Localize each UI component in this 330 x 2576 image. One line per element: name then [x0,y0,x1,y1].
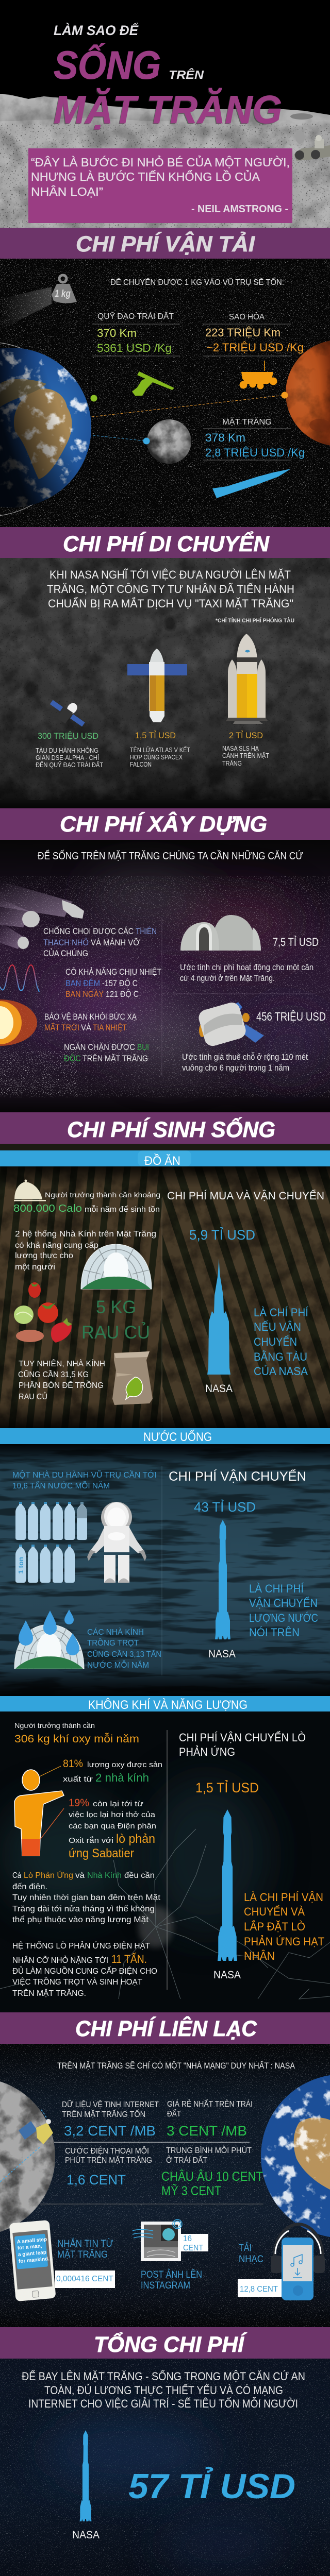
heading band: chi phí sinh sống: CHI PHÍ SINH SỐNG [67,1117,275,1142]
heading band: tổng chi phí: TỔNG CHI PHÍ [94,2331,248,2357]
photo label: INSTAGRAM [141,2280,190,2291]
stat: moon: MẶT TRĂNG [222,417,272,427]
icon: 1 kg weight with trail [0,275,77,330]
icon: nasa rocket silhouette [207,1259,230,1375]
panel: communications [0,2044,330,2327]
fertilizer text: TUY NHIÊN, NHÀ KÍNH [19,1360,105,1368]
base cost: 7,5 TỈ USD [273,936,319,948]
cost: atlas v: 1,5 TỈ USD [135,731,176,740]
panel: transport cost [0,259,330,527]
subheading band: đồ ăn [0,1150,330,1168]
icon: food cloche [14,1180,46,1201]
panel: total cost [0,2359,330,2576]
requirement: temperature: BAN NGÀY [65,989,104,999]
music label: TẢI [239,2242,252,2253]
19 percent text: 19% [69,1797,89,1809]
cost: atlas v [130,731,190,768]
19 percent text [69,1797,156,1860]
rocket label: NASA [72,2529,100,2541]
icon: dse-alpha capsule [46,692,91,733]
cost: dse-alpha: TÀU DU HÀNH KHÔNG [36,747,98,754]
music label [239,2242,263,2265]
title: trên: TRÊN [169,67,204,81]
reactor heading [179,1731,306,1758]
travel intro text: KHI NASA NGHĨ TỚI VIỆC ĐƯA NGƯỜI LÊN MẶT [50,568,291,581]
divider line [162,917,316,1076]
data stat earth: GIÁ RẺ NHẤT TRÊN TRÁI [167,2099,253,2109]
19 percent text: ứng Sabatier [69,1846,134,1860]
electricity text: Cả [12,1871,21,1880]
music price: 12,8 CENT [240,2285,278,2294]
photo price: 16 [183,2234,192,2243]
cost: atlas v: TÊN LỬA ATLAS V KẾT [130,746,190,754]
calorie text: mỗi năm để sinh tồn [85,1205,160,1214]
water cost note: LƯỢNG NƯỚC [249,1612,318,1624]
icon: smartphone message: a giant leap [18,2250,46,2258]
greenhouse text [15,1230,156,1272]
cost: dse-alpha: GIAN DSE-ALPHA - CHỈ [36,754,99,761]
call stat moon: CƯỚC ĐIỆN THOẠI MỖI [65,2146,149,2156]
communications intro: TRÊN MẶT TRĂNG SẼ CHỈ CÓ MỘT "NHÀ MẠNG" DUY NHẤT : NASA [57,2061,295,2071]
vegetable amount [81,1297,150,1343]
photo label [141,2269,202,2291]
requirement: temperature [65,967,161,999]
requirement: radiation: TIA NHIỆT [93,1023,127,1032]
calorie text: Người trưởng thành cần khoảng [45,1191,160,1199]
icon: person oxygen chart [14,1766,64,1856]
icon: water bottles [15,1502,87,1583]
cost: nasa sls [222,731,269,767]
81 percent text: 81% [63,1758,83,1770]
heading band: chi phí sinh sống [0,1112,330,1144]
electricity text: đến điện. [12,1883,47,1891]
requirement: dust: BỤI [137,1042,149,1052]
water cost: 43 TỈ USD [194,1499,256,1515]
call stat earth: MỸ 3 CENT [161,2183,221,2198]
reactor text: VIỆC TRỒNG TRỌT VÀ SINH HOẠT [12,1977,142,1987]
total intro: ĐỂ BAY LÊN MẶT TRĂNG - SỐNG TRONG MỘT CĂN CỨ AN [22,2369,305,2383]
transport heading: CHI PHÍ VẬN CHUYỂN [169,1469,306,1484]
title: làm sao để: LÀM SAO ĐỂ [54,22,139,38]
fertilizer text: RAU CỦ [19,1392,47,1401]
icon: nasa rocket [80,2430,91,2521]
call stat moon: 1,6 CENT [67,2172,126,2188]
rocket label: NASA [205,1383,233,1395]
moon surface background [0,93,330,228]
requirement: dust: NGĂN CHẶN ĐƯỢC [64,1042,135,1052]
music price [238,2279,282,2297]
food cost: 5,9 TỈ USD [189,1226,255,1243]
reactor cost note: LÀ CHI PHÍ VẬN [244,1891,323,1904]
requirement: radiation: MẶT TRỜI [44,1023,79,1032]
reactor heading: CHI PHÍ VẬN CHUYỂN LÒ [179,1731,306,1744]
stat: earth orbit [97,311,174,354]
panel: water [0,1444,330,1696]
heading band: chi phí di chuyển [0,527,330,558]
reactor cost note: PHẢN ỨNG HẠT [244,1935,324,1948]
food cost note: LÀ CHÍ PHÍ [254,1306,309,1319]
electricity text: Nhà Kính [87,1871,122,1880]
call stat moon: PHÚT TRÊN MẶT TRĂNG [65,2155,152,2165]
stat: earth orbit: 370 Km [97,327,137,340]
reactor heading: PHẢN ỨNG [179,1745,235,1758]
icon: atlas v falcon rocket [127,649,187,722]
title: sống: SỐNG [54,43,161,88]
requirement: micro meteorites: CỦA CHÚNG [43,948,88,958]
water need text: MỘT NHÀ DU HÀNH VŨ TRỤ CẦN TỚI [12,1469,157,1480]
reactor text: NHÂN CỠ NHỎ NẶNG TỚI [12,1955,108,1965]
icon: postage stamp [133,2219,182,2261]
stat: mars: SAO HỎA [229,312,265,321]
call stat earth: CHÂU ÂU 10 CENT [161,2169,263,2184]
greenhouse water text: CŨNG CẦN 3,13 TẤN [87,1649,161,1659]
data stat moon: 3,2 CENT /MB [64,2123,156,2139]
81 percent text: 2 nhà kính [95,1771,149,1784]
total amount: 57 TỈ USD [128,2466,295,2506]
music label: NHẠC [239,2254,263,2265]
subheading band: không khí và năng lượng [0,1696,330,1712]
call stat earth: TRUNG BÌNH MỖI PHÚT [166,2145,252,2155]
rocket label: NASA [208,1648,236,1660]
illustration: moon [0,2076,57,2236]
oxygen need: 306 kg khí oxy mỗi năm [14,1733,139,1745]
electricity text: Trăng dài tới nửa tháng vì thế không [12,1905,155,1913]
illustration: earth with orbit ring [0,343,93,516]
heading band: chi phí xây dựng [0,808,330,840]
greenhouse text: lương thực cho [15,1251,73,1260]
cost: nasa sls: 2 TỈ USD [229,731,263,740]
sms label [57,2238,113,2260]
greenhouse text: một người [15,1263,55,1272]
illustration: mars [286,341,330,446]
reactor cost: 1,5 TỈ USD [195,1779,259,1795]
subheading band: không khí và năng lượng: KHÔNG KHÍ VÀ NĂNG LƯỢNG [88,1698,248,1712]
icon: smartphone message: A small step [16,2236,47,2245]
cost: nasa sls: NASA SLS HẠ [222,745,259,752]
greenhouse water text: NƯỚC MỖI NĂM [87,1660,149,1670]
81 percent text: lượng oxy được sản [87,1760,162,1769]
quote text: NHƯNG LÀ BƯỚC TIẾN KHỔNG LỒ CỦA [31,169,260,183]
water cost note: VẬN CHUYỂN [249,1597,318,1609]
lightning illustration [0,1829,330,1999]
call stat earth [161,2145,263,2198]
requirement: micro meteorites: THẠCH NHỎ [43,938,89,947]
heading band: tổng chi phí [0,2327,330,2359]
sms label: NHẮN TIN TỪ [57,2238,113,2249]
greenhouse water text: TRỒNG TRỌT [87,1638,139,1648]
water need text [12,1469,157,1490]
photo label: POST ẢNH LÊN [141,2269,202,2280]
divider [161,1198,162,1422]
greenhouse text: 2 hệ thống Nhà Kính trên Mặt Trăng [15,1230,156,1239]
greenhouse text: có khả năng cung cấp [15,1241,98,1250]
icon: orange mars rover [239,361,277,389]
icon: nasa sls rocket [226,634,268,724]
data stat earth [167,2099,253,2139]
requirement: radiation [44,1012,137,1032]
cost: dse-alpha [36,731,103,769]
water cost note: LÀ CHI PHÍ [249,1582,304,1595]
electricity text: và [75,1871,85,1880]
cost: atlas v: HỢP CÙNG SPACEX [130,753,183,761]
quote text [31,155,290,198]
requirement: temperature: BAN ĐÊM [65,978,100,988]
call stat earth: Ở TRÁI ĐẤT [166,2155,207,2165]
sms label: MẶT TRĂNG [57,2249,108,2260]
icon: greenhouse with drops [14,1609,84,1669]
reactor text: HỆ THỐNG LÒ PHẢN ỨNG ĐIỆN HẠT [12,1940,150,1951]
requirement: radiation: BẢO VỆ BẠN KHỎI BỨC XẠ [44,1012,137,1022]
food cost note: BẰNG TÀU [254,1350,307,1363]
19 percent text: còn lại tới từ [93,1800,143,1808]
quote author: - NEIL AMSTRONG - [191,204,288,215]
icon: lunar base dome [180,915,261,951]
reactor cost note: LẮP ĐẶT LÒ [244,1920,305,1933]
panel: food [0,1166,330,1428]
stat: moon [205,417,305,459]
panel: header with moon landscape [0,22,330,228]
title: mặt trăng shadow: MẶT TRĂNG [53,89,281,133]
data stat moon [62,2099,159,2139]
heading band: chi phí vận tải [0,228,330,259]
icon: green satellite [132,371,174,396]
water cost note [249,1582,318,1639]
oxygen need: Người trưởng thành cần [14,1721,95,1730]
total intro: TOÀN, ĐỦ LƯƠNG THỰC THIẾT YẾU VÀ CÓ MẠNG [44,2384,283,2397]
requirement: temperature: CÓ KHẢ NĂNG CHỊU NHIỆT [65,967,161,977]
rental note [182,1052,308,1073]
subheading band: đồ ăn: ĐỒ ĂN [144,1154,180,1168]
icon: vegetables [14,1282,72,1343]
electricity text: Lò Phản Ứng [24,1870,73,1880]
electricity text [12,1870,161,1924]
19 percent text: Oxit rắn với [69,1836,113,1845]
rental note: vuông cho 6 người trong 1 năm [182,1063,289,1073]
base note: cứ 4 người ở trên Mặt Trăng. [180,973,275,983]
icon: inflatable module [197,1001,264,1048]
requirement: micro meteorites: VÀ MẢNH VỠ [91,938,140,947]
vegetable amount: RAU CỦ [81,1322,150,1343]
total intro [22,2369,305,2410]
requirement: temperature: 121 ĐỘ C [106,989,139,999]
requirement: micro meteorites: THIÊN [136,926,157,936]
icon: 1 kg weight with trail: 1 kg [55,289,71,299]
icon: blue spaceship [212,469,291,498]
icon: smartphone message [9,2220,56,2301]
base note: Ước tính chi phí hoạt động cho một căn [180,962,314,972]
food cost note: CỦA NASA [254,1365,308,1378]
cost: nasa sls: CÁNH TRÊN MẶT [222,752,269,759]
calorie text [13,1191,160,1214]
icon: smartphone message: for mankind. [19,2256,50,2264]
81 percent text: xuất từ [63,1775,93,1784]
cost: dse-alpha: ĐẾN QUỸ ĐẠO TRÁI ĐẤT [36,761,103,769]
icon: temperature wave [0,965,39,992]
heading band: chi phí xây dựng: CHI PHÍ XÂY DỰNG [60,811,267,837]
19 percent text: lò phản [116,1832,155,1846]
illustration: earth [258,2071,330,2241]
dividers [92,324,291,460]
quote text: “ĐÂY LÀ BƯỚC ĐI NHỎ BÉ CỦA MỘT NGƯỜI, [31,155,290,169]
stat: moon: 378 Km [205,431,245,444]
requirement: dust: ĐỘC [64,1054,81,1063]
icon: smartphone message: for a man, [17,2243,42,2251]
illustration: moon [147,419,191,464]
calorie text: 800.000 Calo [13,1203,82,1214]
heading band: chi phí liên lạc [0,2012,330,2044]
icon: fertilizer bag [112,1351,153,1405]
water cost note: NÓI TRÊN [249,1626,300,1639]
cost: nasa sls: TRĂNG [222,759,242,767]
reactor text: ĐỦ LÀM NGUỒN CUNG CẤP ĐIỆN CHO [12,1966,157,1976]
reactor cost note [244,1891,324,1962]
reactor cost note: NHÂN [244,1950,275,1962]
icon: nasa rocket [215,1520,230,1639]
sms price [55,2270,115,2288]
divider [167,1730,168,1990]
call stat moon [65,2146,152,2188]
reactor text [12,1940,157,1998]
dark gap strip [0,1144,330,1150]
greenhouse water text: CÁC NHÀ KÍNH [87,1627,144,1637]
requirement: micro meteorites: CHỐNG CHỌI ĐƯỢC CÁC [43,926,134,936]
total intro: INTERNET CHO VIỆC GIẢI TRÍ - SẼ TIÊU TỐN MỖI NGƯỜI [28,2397,298,2410]
dividers [54,2142,250,2143]
divider [161,1466,162,1675]
cost: dse-alpha: 300 TRIỆU USD [38,731,98,741]
19 percent text: các bạn qua Điện phân [69,1822,156,1831]
footnote: *CHỈ TÍNH CHI PHÍ PHÓNG TÀU [216,617,294,624]
base note [180,962,314,983]
icon: music phone with headphones [271,2224,325,2300]
icon: orbiting satellite [0,2110,53,2182]
electricity text: đều cần [124,1871,155,1880]
requirement: micro meteorites [43,926,157,958]
food cost note: NẾU VẬN [254,1320,301,1333]
heading band: chi phí di chuyển: CHI PHÍ DI CHUYỂN [63,531,270,556]
subheading band: nước uống: NƯỚC UỐNG [143,1430,212,1444]
data stat earth: 3 CENT /MB [167,2123,247,2139]
vegetable amount: 5 KG [96,1297,136,1317]
heading band: chi phí vận tải: CHI PHÍ VẬN TẢI [76,231,255,257]
title: mặt trăng: MẶT TRĂNG [54,88,282,132]
data stat earth: ĐẤT [167,2109,181,2119]
quote text: NHÂN LOẠI” [31,185,103,198]
route lines and dots [91,392,288,444]
panel: air and energy [0,1711,330,2012]
travel intro text: TRĂNG, MỘT CÔNG TY TƯ NHÂN ĐÃ TIẾN HÀNH [47,583,294,596]
intro text: ĐỂ CHUYỂN ĐƯỢC 1 KG VÀO VŨ TRỤ SẼ TỐN: [110,277,284,287]
electricity text: thể phụ thuộc vào năng lượng Mặt [12,1915,149,1924]
icon: dust particles [0,1051,77,1095]
fertilizer text [18,1360,105,1401]
icon: nasa rocket [218,1809,237,1961]
requirement: dust [64,1042,149,1063]
oxygen need [14,1721,139,1745]
requirement: radiation: VÀ [81,1023,92,1032]
rocket label: NASA [213,1969,241,1981]
data stat moon: TRÊN MẶT TRĂNG TỐN [62,2109,145,2119]
sms price: 0,000416 CENT [56,2275,113,2283]
panel: construction cost [0,840,330,1112]
lunar rover photo element [294,130,330,161]
19 percent text: việc lọc lại hơi thở của [69,1810,156,1819]
panel: travel cost [0,558,330,808]
reactor text: 11 TẤN. [111,1953,147,1965]
heading band: chi phí liên lạc: CHI PHÍ LIÊN LẠC [75,2016,257,2041]
photo price: CENT [183,2244,203,2252]
stat: mars [205,312,304,354]
cost: atlas v: FALCON [130,761,152,768]
requirement: dust: TRÊN MẶT TRĂNG [82,1054,148,1063]
greenhouse water text [87,1627,161,1670]
food cost note [254,1306,309,1378]
subheading band: nước uống [0,1428,330,1444]
fertilizer text: PHÂN BÓN ĐỂ TRỒNG [19,1381,104,1390]
travel intro text [47,568,294,610]
food cost note: CHUYỂN [254,1335,297,1348]
requirement: temperature: -157 ĐỘ C [102,978,138,988]
stat: mars: ~2 TRIỆU USD /Kg [206,341,304,354]
rental note: Ước tính giá thuê chỗ ở rộng 110 mét [182,1052,308,1062]
photo price [180,2234,208,2252]
icon: greenhouse [81,1244,152,1289]
quote box [28,148,292,223]
fertilizer text: CŨNG CẦN 31,5 KG [18,1370,89,1379]
stat: mars: 223 TRIỆU Km [205,326,280,339]
reactor cost note: CHUYỂN VÀ [244,1905,305,1918]
icon: sun flare [0,999,37,1046]
81 percent text [63,1758,162,1784]
icon: water bottles: 1 ton [17,1557,25,1574]
electricity text: Tuy nhiên thời gian ban đêm trên Mặt [12,1893,161,1902]
data stat moon: DỮ LIỆU VỆ TINH INTERNET [62,2099,159,2109]
stat: earth orbit: QUỸ ĐẠO TRÁI ĐẤT [97,311,174,321]
icon: astronaut [87,1502,146,1583]
stat: moon: 2,8 TRIỆU USD /Kg [205,446,305,459]
water need text: 10,6 TẤN NƯỚC MỖI NĂM [12,1481,110,1490]
food transport heading: CHI PHÍ MUA VÀ VẬN CHUYỂN [167,1190,324,1202]
icon: meteors [0,881,84,949]
travel intro text: CHUẨN BỊ RA MẮT DỊCH VỤ "TAXI MẶT TRĂNG" [48,597,293,610]
reactor text: TRÊN MẶT TRĂNG. [12,1988,86,1998]
stat: earth orbit: 5361 USD /Kg [97,342,172,354]
